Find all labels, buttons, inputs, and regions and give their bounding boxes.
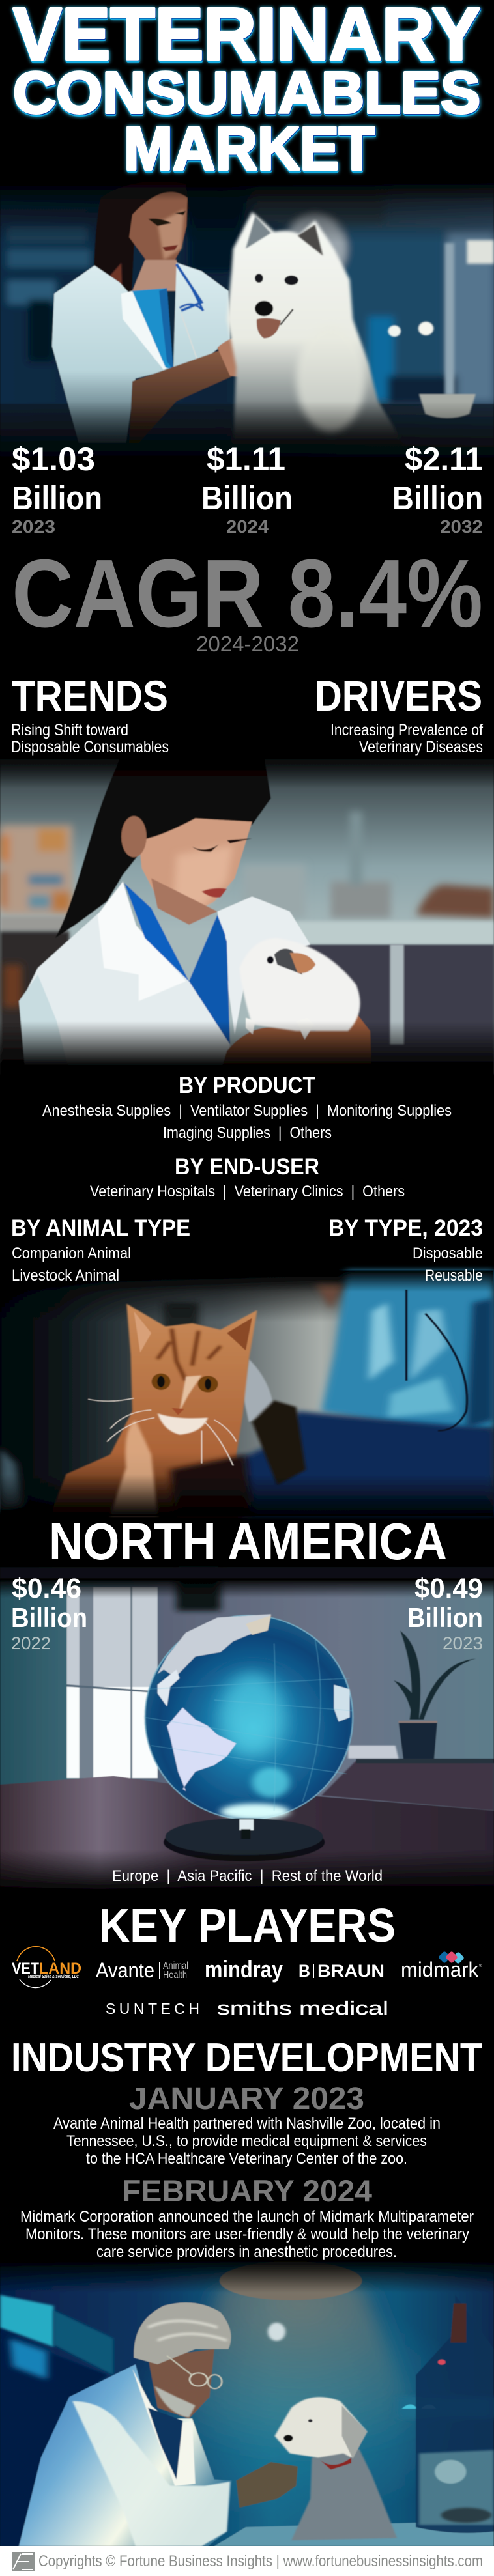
regional stat 2022: $0.46 [12,1573,81,1604]
stat 2032 [392,441,483,537]
trends: TRENDS [12,672,168,720]
globe land [145,1614,353,1811]
segment: by animal type: BY ANIMAL TYPE [11,1215,190,1241]
development: February 2024 [20,2173,474,2261]
segment: by type: Disposable [413,1245,483,1262]
development: January 2023: to the HCA Healthcare Veterinary Center of the zoo. [86,2150,407,2168]
illustration: cat with vet [0,1270,494,1516]
company logos [12,1947,482,2019]
regional stat 2023: Billion [407,1602,483,1633]
regional stat 2023: $0.49 [414,1573,483,1604]
window [66,1587,158,1778]
table [214,2521,494,2546]
region heading: north america: NORTH AMERICA [49,1512,447,1570]
stat 2023: $1.03 [12,441,95,477]
trends: Disposable Consumables [11,738,169,756]
logo: Vetland: VET [12,1960,39,1977]
heading: key players: KEY PLAYERS [99,1900,396,1952]
logo: Mindray: mindray [205,1956,283,1983]
segment: by animal type [11,1215,190,1284]
development: February 2024: FEBRUARY 2024 [122,2173,372,2208]
regional stat 2022 [11,1573,87,1653]
illustration: vet with guinea pig [0,756,494,1079]
segment: by product: Anesthesia Supplies | Ventilator Supplies | Monitoring Supplies [42,1102,452,1120]
development: January 2023: Avante Animal Health partnered with Nashville Zoo, located in [53,2115,441,2132]
logo: B. Braun: B [298,1961,310,1981]
segment: by animal type: Livestock Animal [12,1267,119,1284]
small dog [275,2397,397,2540]
logo: Midmark: ® [479,1964,482,1968]
stat 2024: 2024 [226,517,269,537]
logo: Midmark: midmark [401,1958,479,1981]
white dog [227,212,403,443]
segment: by animal type: Companion Animal [12,1245,131,1262]
illustration: vet with small dog [0,2260,494,2546]
illustration: globe on table [0,1568,494,1891]
title: MARKET [124,114,375,182]
segment: by end-user: Veterinary Hospitals | Veterinary Clinics | Others [90,1183,405,1200]
trends [11,672,169,756]
stat 2023: Billion [12,479,102,517]
segment: by product: BY PRODUCT [179,1073,315,1098]
regional stat 2022: 2022 [11,1634,51,1653]
stat 2024: Billion [201,479,293,517]
logo: Vetland: Medical Sales & Services, LLC [28,1975,80,1979]
stat 2032: $2.11 [405,441,483,477]
regional stat 2023: 2023 [443,1634,483,1653]
development: January 2023: Tennessee, U.S., to provide medical equipment & services [66,2132,427,2150]
veterinarian [19,2302,298,2546]
logo: Avante Animal Health: Health [163,1970,187,1981]
logo: Vetland: LAND [39,1960,81,1977]
footer [0,2546,494,2576]
vet in blue scrubs [239,1270,494,1516]
stat 2032: Billion [392,479,483,517]
logo: Avante Animal Health [96,1959,188,1982]
icon: Fortune Business Insights logo [12,2552,35,2571]
logo: Avante Animal Health: Animal [163,1960,188,1972]
logo: B. Braun: BRAUN [317,1961,385,1981]
segment: by type [328,1215,483,1284]
segment: by type: Reusable [425,1267,483,1284]
stat 2024: $1.11 [207,441,285,477]
stat 2024 [201,441,293,537]
other regions: Europe | Asia Pacific | Rest of the World [112,1867,383,1885]
segment: by end-user [90,1154,405,1200]
globe [144,1614,353,1820]
orange tabby cat [50,1304,257,1516]
development: February 2024: care service providers in anesthetic procedures. [96,2243,397,2261]
stat 2032: 2032 [440,517,483,537]
logo: SunTech: SUNTECH [106,2000,199,2017]
guinea pig and hands [220,938,371,1073]
segment: by product [42,1073,452,1142]
vet: hair, face, coat [19,759,310,1073]
illustration: vet with white dog [0,173,494,475]
drivers [315,672,483,756]
logo: Smiths Medical: smiths medical [217,1998,388,2019]
stat 2023: 2023 [12,517,55,537]
stat 2023 [12,441,102,537]
jar and equipment [397,2295,494,2533]
regional stat 2022: Billion [11,1602,87,1633]
globe stand [164,1819,325,1861]
logo: Avante Animal Health: Avante [96,1959,154,1982]
title: CONSUMABLES [13,61,480,126]
lamp [158,2261,441,2480]
logo: Vetland [12,1947,81,1988]
regional stat 2023 [407,1573,483,1653]
trends: Rising Shift toward [11,721,128,739]
CAGR: 2024-2032 [196,632,299,656]
plant [394,1630,476,1759]
segment: by type: BY TYPE, 2023 [328,1215,483,1241]
vet: hair, face, coat [52,181,268,443]
segment: by end-user: BY END-USER [175,1154,319,1180]
development: January 2023: JANUARY 2023 [129,2082,364,2116]
table and cabinet [0,1746,494,1889]
cabinets [0,2295,113,2546]
title [13,0,480,182]
market value stats [12,441,483,537]
segment: by product: Imaging Supplies | Others [163,1124,332,1142]
development: January 2023 [53,2082,441,2168]
